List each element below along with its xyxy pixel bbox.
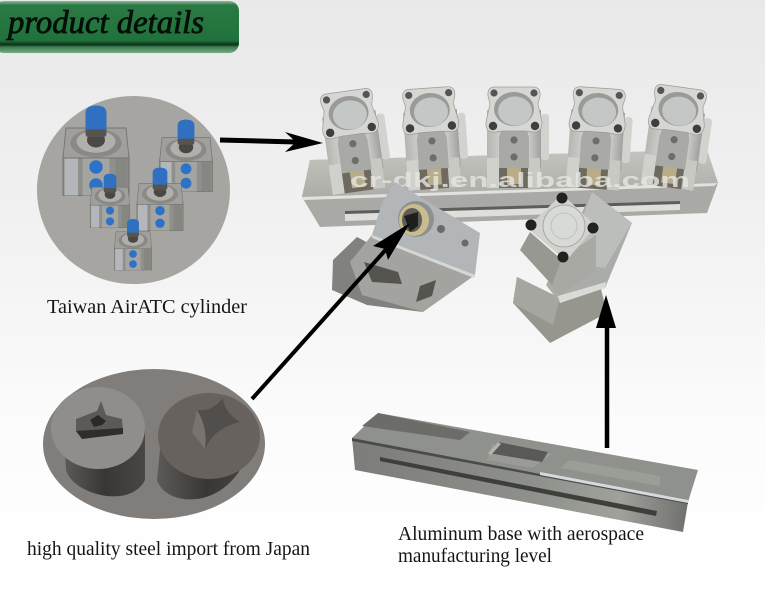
caption: aluminum base: Aluminum base with aerospace <box>398 523 644 545</box>
caption: Taiwan AirATC cylinder: Taiwan AirATC cylinder <box>47 296 247 318</box>
arrow: cylinder callout <box>220 132 323 152</box>
product photo: single cylinder on bracket <box>513 192 632 343</box>
long base bar <box>302 150 718 227</box>
product photo: aluminum base <box>352 413 698 532</box>
photo: steel dies in ellipse <box>43 369 265 519</box>
caption: aluminum base <box>398 523 644 567</box>
caption: high quality steel: high quality steel import from Japan <box>27 538 310 560</box>
watermark: cr-dkj.en.alibaba.com <box>350 170 690 192</box>
caption: aluminum base: manufacturing level <box>398 545 552 567</box>
cylinder 4 <box>90 174 130 228</box>
cylinder 5 <box>114 219 152 270</box>
heading text: product details <box>6 5 204 41</box>
product photo: die block with bore <box>332 182 480 312</box>
arrow: steel callout <box>252 223 410 399</box>
photo: Taiwan AirATC cylinders in circle <box>37 96 230 284</box>
cylinder row <box>318 86 394 195</box>
right die <box>157 393 260 499</box>
product photo: main assembly with five cylinders <box>302 83 718 227</box>
cylinder 2 <box>160 120 212 192</box>
cylinder 3 <box>137 168 183 231</box>
cylinder 1 <box>63 106 129 196</box>
left die <box>51 387 145 496</box>
heading banner: product details <box>0 1 239 53</box>
arrow: aluminum callout <box>596 295 616 448</box>
